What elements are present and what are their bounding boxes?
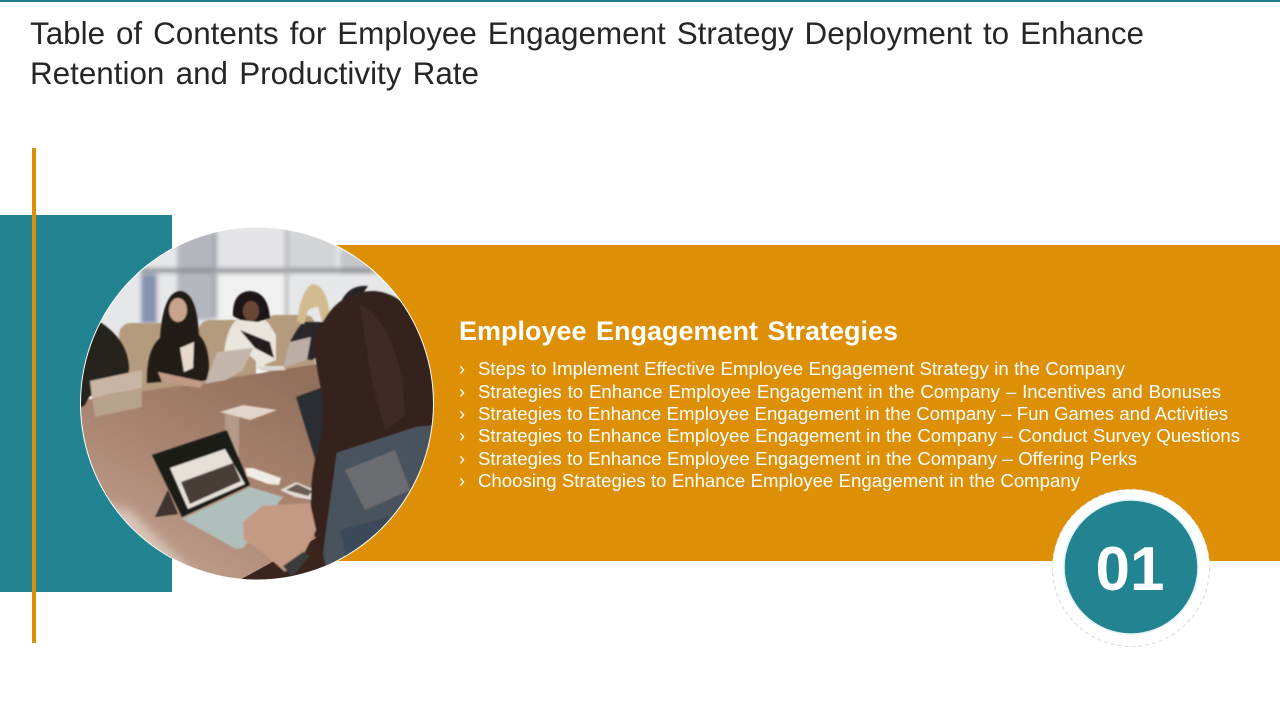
title [30, 16, 1144, 91]
woman with glasses [147, 291, 209, 384]
heading: Employee Engagement Strategies: Employee Engagement Strategies [459, 316, 898, 346]
photo: meeting room circle [80, 228, 434, 580]
bullet list: › [459, 471, 465, 491]
bullet list: › [459, 449, 465, 469]
tablet on table [152, 430, 250, 517]
panel: teal block [0, 215, 172, 592]
vertical orange line [32, 148, 36, 643]
left tablet [90, 370, 142, 398]
bullet list: › [459, 359, 465, 379]
title: Retention and Productivity Rate [30, 56, 479, 91]
hands [243, 503, 316, 572]
bullet list: › [459, 426, 465, 446]
bullet list: Strategies to Enhance Employee Engagement in the Company – Fun Games and Activities [478, 403, 1228, 424]
laptops [205, 348, 253, 384]
jacket [322, 424, 432, 566]
table [81, 363, 338, 580]
bullet list: Choosing Strategies to Enhance Employee Engagement in the Company [478, 470, 1080, 491]
phones [245, 468, 281, 485]
chairs [118, 314, 316, 392]
paper and bottle [220, 405, 277, 420]
bullet list: Strategies to Enhance Employee Engagement in the Company – Incentives and Bonuses [478, 381, 1221, 402]
back laptop screen [295, 387, 324, 460]
bullet list [459, 358, 1240, 491]
woman in striped sweater [224, 318, 276, 366]
bullet list: › [459, 382, 465, 402]
bullet list: Steps to Implement Effective Employee Engagement Strategy in the Company [478, 358, 1125, 379]
panel: orange band [257, 245, 1280, 561]
bullet list: Strategies to Enhance Employee Engagement in the Company – Conduct Survey Questions [478, 425, 1240, 446]
blonde woman [290, 320, 324, 361]
bullet list: Strategies to Enhance Employee Engagement in the Company – Offering Perks [478, 448, 1137, 469]
woman from behind: hair [310, 290, 433, 544]
top border line [0, 0, 1280, 2]
left person [76, 322, 129, 408]
bullet list: › [459, 404, 465, 424]
title: Table of Contents for Employee Engagement Strategy Deployment to Enhance [30, 16, 1144, 51]
number badge: 01: 01 [1096, 535, 1164, 604]
keyboard [182, 487, 283, 549]
windows [100, 228, 400, 371]
number badge: 01 [1052, 489, 1210, 647]
